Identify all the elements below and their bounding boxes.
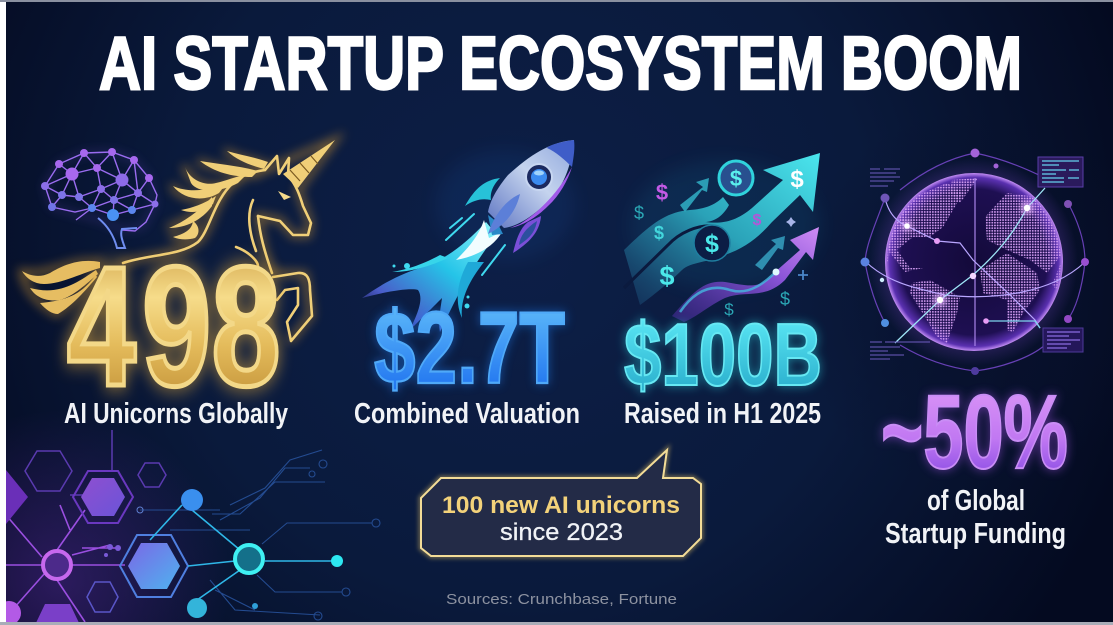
stat: $100B: $100B — [624, 305, 822, 404]
stat: ~50% — [877, 388, 1074, 476]
data panel: bottom right — [1043, 328, 1083, 352]
callout: 100 new AI unicorns: 100 new AI unicorns — [442, 492, 680, 519]
tail — [22, 261, 100, 314]
label: Combined Valuation: Combined Valuation — [354, 398, 580, 430]
label: Raised in H1 2025: Raised in H1 2025 — [624, 398, 821, 430]
callout: 100 new AI unicorns: since 2023 — [500, 519, 623, 546]
source note: Sources: Crunchbase, Fortune — [446, 591, 677, 608]
stat: $2.7T: $2.7T — [374, 291, 565, 405]
icon: money growth arrows: $ — [730, 166, 742, 191]
stat: $100B — [619, 314, 826, 397]
icon: money growth arrows: $ — [656, 180, 668, 205]
stat: $2.7T: $2.7T — [374, 291, 565, 405]
icon: money growth arrows: $ — [790, 166, 804, 193]
decoration: hexagon circuit network — [0, 430, 380, 625]
horn — [278, 140, 335, 200]
icon: money growth arrows: $ — [634, 203, 644, 223]
icon: money growth arrows: $ — [705, 230, 719, 258]
icon: money growth arrows: $ — [753, 212, 762, 229]
icon: money growth arrows: $ — [780, 289, 790, 309]
icon: money growth arrows: $ — [724, 300, 734, 319]
stat: $100B: $100B — [624, 305, 822, 404]
stat: 498: 498 — [67, 231, 281, 422]
icon: money growth arrows — [624, 153, 820, 322]
data panel: top right — [1038, 157, 1083, 187]
icon: golden unicorn — [22, 140, 335, 341]
callout: 100 new AI unicorns — [421, 450, 701, 556]
stat: $2.7T — [369, 302, 571, 396]
stat: 498: 498 — [67, 231, 281, 422]
icon: digital globe — [860, 148, 1089, 375]
label: of Global Startup Funding: of Global — [927, 485, 1025, 517]
label: of Global Startup Funding: Startup Funding — [885, 518, 1066, 550]
icon: rocket — [362, 140, 575, 332]
label: of Global Startup Funding — [885, 485, 1066, 550]
icon: neural brain — [41, 148, 158, 248]
icon: money growth arrows: $ — [654, 223, 664, 243]
icon: money growth arrows: $ — [659, 261, 675, 291]
label: AI Unicorns Globally: AI Unicorns Globally — [64, 398, 288, 430]
mane strands — [169, 151, 268, 239]
